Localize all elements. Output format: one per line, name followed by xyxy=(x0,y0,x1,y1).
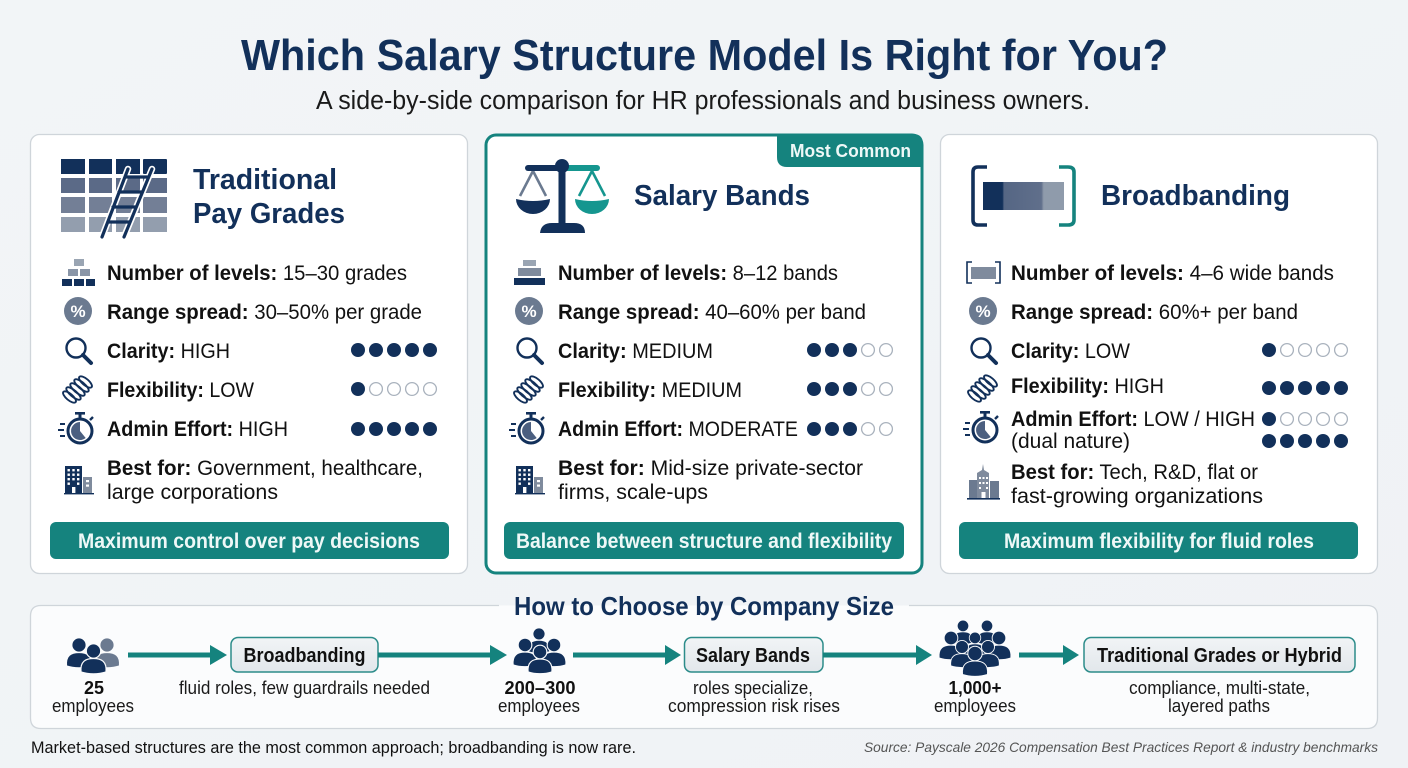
box: salary bands xyxy=(684,638,823,672)
icon: wide band in brackets xyxy=(973,167,1074,225)
rating: flexibility xyxy=(351,382,436,396)
label: 200–300 employees xyxy=(498,678,580,716)
summary pill: Maximum control over pay decisions xyxy=(78,530,420,553)
panel: broadbanding xyxy=(940,134,1378,574)
icon: large team xyxy=(939,620,1011,676)
label: 25 employees xyxy=(52,678,134,716)
icon: stopwatch xyxy=(509,412,544,443)
summary pill xyxy=(959,522,1358,559)
note: roles specialize, xyxy=(693,678,813,698)
box: broadbanding: Broadbanding xyxy=(244,645,366,667)
admin effort: Admin Effort: MODERATE xyxy=(558,418,798,441)
rating: clarity xyxy=(807,343,892,357)
flexibility: Flexibility: HIGH xyxy=(1011,375,1164,398)
clarity: Clarity: HIGH xyxy=(107,340,230,363)
clarity: Clarity: LOW xyxy=(1011,340,1130,363)
arrow xyxy=(573,645,681,665)
panel: traditional pay grades xyxy=(30,134,468,574)
admin effort: (dual nature) xyxy=(1011,430,1130,453)
box: broadbanding xyxy=(231,638,378,672)
number of levels: Number of levels: 15–30 grades xyxy=(107,262,407,285)
heading: Broadbanding xyxy=(1101,180,1290,212)
icon: building xyxy=(515,466,545,494)
icon: spring xyxy=(512,374,545,405)
best for xyxy=(1011,461,1263,508)
summary pill: Balance between structure and flexibility xyxy=(516,530,892,553)
icon: mid-size team xyxy=(513,628,566,674)
arrow xyxy=(823,645,932,665)
note: compliance, multi-state, xyxy=(1129,678,1310,698)
rating: admin effort high xyxy=(1262,434,1348,448)
panel: salary bands xyxy=(486,134,923,573)
icon: percent xyxy=(969,297,997,325)
icon: magnifier xyxy=(518,338,542,363)
icon: stopwatch xyxy=(58,412,93,443)
clarity: Clarity: MEDIUM xyxy=(558,340,713,363)
icon: bricks xyxy=(62,259,95,286)
icon: balance scale xyxy=(516,159,609,233)
badge: most common xyxy=(777,134,923,167)
icon: percent xyxy=(515,297,543,325)
icon: magnifier xyxy=(66,338,91,363)
number of levels: Number of levels: 4–6 wide bands xyxy=(1011,262,1334,285)
icon: building xyxy=(64,466,94,494)
best for xyxy=(558,457,863,504)
label: 1,000+ employees: 1,000+ xyxy=(948,678,1002,698)
rating: flexibility xyxy=(807,382,892,396)
range spread: Range spread: 60%+ per band xyxy=(1011,301,1298,324)
arrow xyxy=(378,645,507,665)
icon: percent: % xyxy=(975,302,991,321)
heading: Pay Grades xyxy=(193,198,345,230)
summary pill: Maximum flexibility for fluid roles xyxy=(1004,530,1314,553)
heading: Salary Bands xyxy=(634,180,810,212)
panel: how to choose by company size xyxy=(30,591,1378,728)
range spread: Range spread: 40–60% per band xyxy=(558,301,866,324)
label: 200–300 employees: employees xyxy=(498,696,580,716)
best for: fast-growing organizations xyxy=(1011,485,1263,508)
icon: spring xyxy=(61,374,94,405)
best for: Best for: Mid-size private-sector xyxy=(558,457,863,480)
flexibility: Flexibility: MEDIUM xyxy=(558,379,742,402)
rating: flexibility xyxy=(1262,381,1348,395)
note xyxy=(668,678,840,716)
arrow xyxy=(128,645,227,665)
box: traditional grades or hybrid: Traditional Grades or Hybrid xyxy=(1097,645,1342,667)
label: 1,000+ employees: employees xyxy=(934,696,1016,716)
rating: admin effort xyxy=(807,422,892,436)
footnote: Market-based structures are the most common approach; broadbanding is now rare. xyxy=(31,738,636,757)
heading: How to Choose by Company Size xyxy=(514,591,894,621)
admin effort: Admin Effort: LOW / HIGH xyxy=(1011,408,1255,431)
number of levels: Number of levels: 8–12 bands xyxy=(558,262,838,285)
admin effort: Admin Effort: HIGH xyxy=(107,418,288,441)
rating: admin effort xyxy=(351,422,437,436)
admin effort xyxy=(1011,408,1255,453)
heading: Traditional xyxy=(193,164,337,196)
note: compression risk rises xyxy=(668,696,840,716)
label: 1,000+ employees xyxy=(934,678,1016,716)
label: 25 employees: 25 xyxy=(84,678,104,698)
icon: percent xyxy=(64,297,92,325)
summary pill xyxy=(50,522,449,559)
range spread: Range spread: 30–50% per grade xyxy=(107,301,422,324)
subtitle: A side-by-side comparison for HR professionals and business owners. xyxy=(316,87,1090,115)
badge: most common: Most Common xyxy=(790,141,911,161)
rating: clarity xyxy=(351,343,437,357)
label: 25 employees: employees xyxy=(52,696,134,716)
note: layered paths xyxy=(1168,696,1270,716)
flexibility: Flexibility: LOW xyxy=(107,379,254,402)
source: Source: Payscale 2026 Compensation Best Practices Report & industry benchmarks xyxy=(864,739,1378,755)
icon: wide level xyxy=(967,262,1000,283)
rating: admin effort low xyxy=(1262,412,1347,426)
icon: small team xyxy=(66,638,120,674)
best for: firms, scale-ups xyxy=(558,481,708,504)
note: fluid roles, few guardrails needed xyxy=(179,678,430,698)
box: traditional grades or hybrid xyxy=(1084,638,1355,672)
icon: magnifier xyxy=(972,338,996,363)
icon: grade grid with ladder xyxy=(61,159,167,237)
icon: spring xyxy=(966,373,999,404)
icon: stacked tiers xyxy=(514,260,545,285)
icon: percent: % xyxy=(521,302,537,321)
best for: Best for: Tech, R&D, flat or xyxy=(1011,461,1258,484)
icon: stopwatch xyxy=(963,411,998,442)
box: salary bands: Salary Bands xyxy=(696,645,810,667)
heading xyxy=(193,164,345,230)
rating: clarity xyxy=(1262,343,1347,357)
title: Which Salary Structure Model Is Right for You? xyxy=(241,31,1168,80)
icon: city towers xyxy=(967,464,1000,500)
best for: Best for: Government, healthcare, xyxy=(107,457,423,480)
note xyxy=(1129,678,1310,716)
arrow xyxy=(1019,645,1079,665)
icon: percent: % xyxy=(70,302,86,321)
summary pill xyxy=(504,522,904,559)
label: 200–300 employees: 200–300 xyxy=(504,678,576,698)
best for: large corporations xyxy=(107,481,278,504)
best for xyxy=(107,457,423,504)
